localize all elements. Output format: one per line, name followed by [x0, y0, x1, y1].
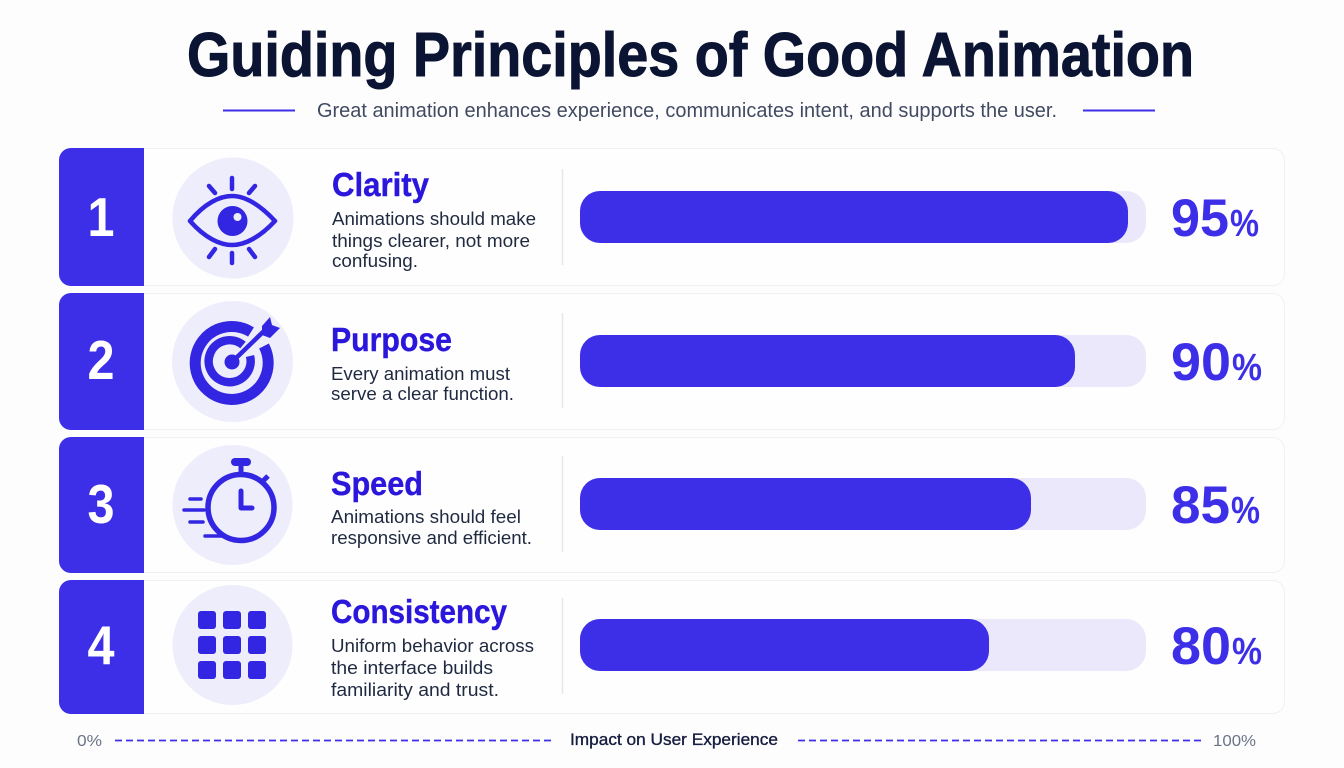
- heading: speed: Speed: [331, 465, 423, 502]
- description: speed: Animations should feel: [331, 506, 521, 527]
- description: consistency: familiarity and trust.: [331, 679, 499, 700]
- value: 95%: [1171, 189, 1259, 248]
- value: 80%: [1171, 617, 1262, 676]
- description: consistency: Uniform behavior across: [331, 635, 534, 656]
- number badge 1: 1: [88, 186, 114, 248]
- bar: 80%: [580, 619, 1146, 671]
- value: 95%: 95: [1171, 189, 1229, 248]
- number badge 1: [59, 148, 144, 286]
- panel: consistency: [59, 580, 1284, 714]
- description: speed: responsive and efficient.: [331, 527, 532, 548]
- value: 95%: %: [1230, 203, 1259, 245]
- description: purpose: serve a clear function.: [331, 383, 514, 404]
- axis: impact on user experience: [77, 730, 1256, 750]
- value: 85%: [1171, 476, 1260, 535]
- value: 90%: %: [1232, 347, 1262, 389]
- description: purpose: [331, 363, 514, 404]
- heading: consistency: Consistency: [331, 593, 508, 630]
- description: clarity: things clearer, not more: [332, 230, 530, 251]
- heading: clarity: Clarity: [332, 166, 430, 203]
- value: 90%: [1171, 333, 1262, 392]
- axis: impact on user experience: 0%: [77, 733, 102, 750]
- description: speed: [331, 506, 532, 548]
- panel: speed: [59, 437, 1284, 573]
- number badge 3: [59, 437, 144, 573]
- axis: impact on user experience: 100%: [1213, 733, 1256, 750]
- value: 80%: %: [1232, 631, 1262, 673]
- subtitle: Great animation enhances experience, communicates intent, and supports the user.: [317, 100, 1057, 122]
- value: 85%: 85: [1171, 476, 1230, 535]
- panel: clarity: [59, 148, 1284, 286]
- number badge 2: 2: [88, 329, 114, 391]
- description: consistency: the interface builds: [331, 657, 493, 678]
- description: clarity: confusing.: [332, 250, 418, 271]
- number badge 3: 3: [88, 473, 114, 535]
- description: purpose: Every animation must: [331, 363, 510, 384]
- panel: purpose: [59, 293, 1284, 430]
- description: clarity: Animations should make: [332, 208, 536, 229]
- number badge 4: 4: [88, 614, 115, 676]
- number badge 4: [59, 580, 144, 714]
- icon: stopwatch: [172, 445, 292, 565]
- bar: 95%: [580, 191, 1146, 243]
- number badge 2: [59, 293, 144, 430]
- description: consistency: [331, 635, 534, 700]
- icon: target with arrow: [172, 301, 293, 422]
- value: 90%: 90: [1171, 333, 1231, 392]
- heading: purpose: Purpose: [331, 321, 452, 358]
- bar: 85%: [580, 478, 1146, 530]
- title: Guiding Principles of Good Animation: [187, 21, 1194, 90]
- description: clarity: [332, 208, 536, 271]
- icon: grid: [172, 585, 292, 705]
- value: 80%: 80: [1171, 617, 1231, 676]
- value: 85%: %: [1231, 490, 1260, 532]
- bar: 90%: [580, 335, 1146, 387]
- icon: eye: [172, 158, 294, 278]
- axis: impact on user experience: Impact on User Experience: [570, 730, 778, 749]
